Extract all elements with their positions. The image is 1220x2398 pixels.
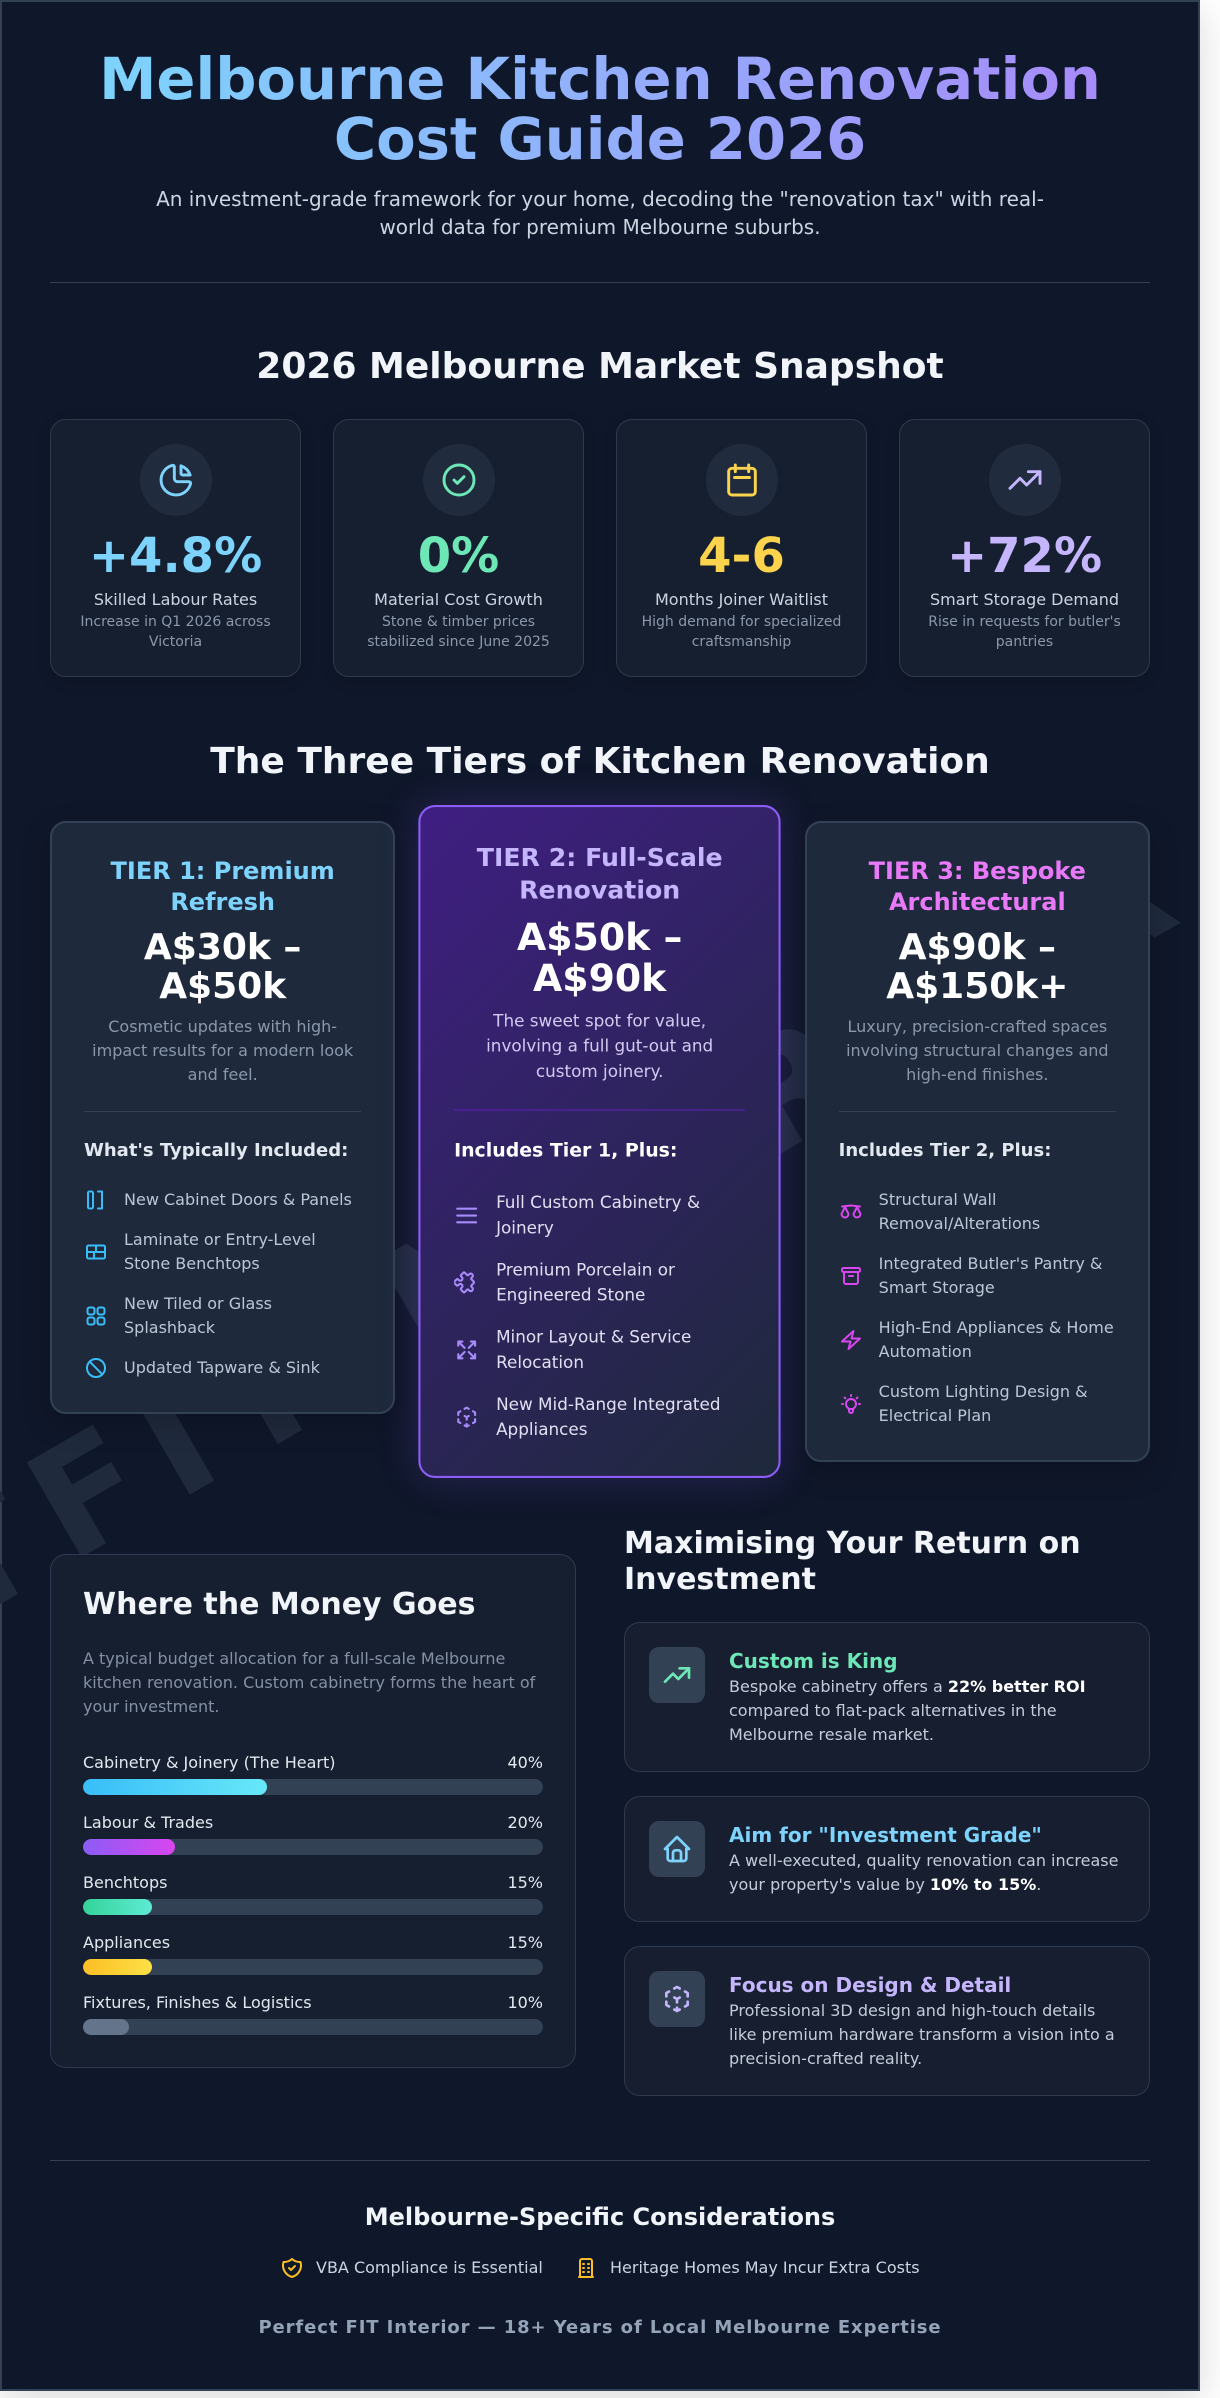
panel: stat skilled labour — [50, 419, 301, 677]
stat note — [928, 614, 1121, 650]
item: splashback — [86, 1294, 272, 1337]
item: appliances automation: Automation — [879, 1342, 972, 1361]
item: benchtops: Laminate or Entry-Level — [124, 1230, 316, 1249]
stat value: 0% — [418, 528, 499, 584]
text — [729, 1973, 1115, 2068]
heading: melbourne considerations: Melbourne-Specific Considerations — [365, 2203, 835, 2231]
bar: cabinetry 40%: 40% — [507, 1753, 543, 1772]
tier 1 title: Refresh — [170, 888, 275, 916]
tier 2 description: The sweet spot for value, — [494, 1011, 706, 1031]
item: cabinet doors: New Cabinet Doors & Panels — [124, 1190, 352, 1209]
bar: appliances 15%: 15% — [507, 1933, 543, 1952]
item: butler's pantry — [841, 1254, 1102, 1297]
tier 3 title — [868, 857, 1086, 916]
bar: benchtops 15% — [83, 1873, 543, 1915]
tier 1 price: A$30k – — [144, 927, 301, 968]
item: VBA compliance: VBA Compliance is Essential — [316, 2258, 543, 2277]
icon: trending up — [988, 444, 1060, 516]
stat value: 4-6 — [698, 528, 785, 584]
bar: benchtops 15%: Benchtops — [83, 1873, 167, 1892]
tier 1 description: impact results for a modern look — [92, 1041, 353, 1060]
text: Bespoke cabinetry offers a 22% better ROI — [729, 1677, 1086, 1696]
text: Custom is King — [729, 1649, 898, 1673]
tier 2 title: Renovation — [519, 876, 681, 905]
tier 3 description: high-end finishes. — [906, 1065, 1048, 1084]
title: Cost Guide 2026 — [334, 106, 866, 173]
stat label: Months Joiner Waitlist — [655, 590, 828, 609]
item: porcelain stone: Premium Porcelain or — [496, 1259, 675, 1279]
icon: trending up — [649, 1647, 705, 1703]
bar: benchtops 15%: 15% — [507, 1873, 543, 1892]
tier 1 list heading: What's Typically Included: — [84, 1140, 348, 1161]
icon: calendar — [706, 444, 778, 516]
tier 2 list heading: Includes Tier 1, Plus: — [454, 1140, 678, 1162]
tier 3 list heading: Includes Tier 2, Plus: — [839, 1140, 1051, 1161]
tier 2 description — [454, 1008, 746, 1110]
item: butler's pantry: Integrated Butler's Pantry & — [879, 1254, 1102, 1273]
item: custom cabinetry — [456, 1192, 700, 1237]
text — [729, 1823, 1118, 1894]
tier 1 description: and feel. — [188, 1065, 258, 1084]
intro text: A typical budget allocation for a full-scale Melbourne — [83, 1649, 505, 1668]
panel: design and detail — [624, 1946, 1150, 2096]
text: your property's value by 10% to 15%. — [729, 1875, 1041, 1894]
stat note — [80, 614, 271, 650]
stat note: pantries — [996, 634, 1053, 650]
intro text: kitchen renovation. Custom cabinetry forms the heart of — [83, 1673, 535, 1692]
tier 1 feature list — [86, 1190, 352, 1378]
tier 2 title — [476, 843, 723, 905]
text: compared to flat-pack alternatives in the — [729, 1701, 1057, 1720]
item: custom cabinetry: Full Custom Cabinetry & — [496, 1192, 700, 1212]
tier 3 description — [839, 1015, 1116, 1112]
heading: maximising return — [624, 1526, 1081, 1597]
stat note: Rise in requests for butler's — [928, 614, 1121, 630]
item: heritage homes: Heritage Homes May Incur Extra Costs — [610, 2258, 920, 2277]
item: integrated appliances: Appliances — [496, 1419, 588, 1439]
tier 1 title — [110, 857, 335, 916]
heading: Where the Money Goes — [83, 1587, 475, 1622]
text: like premium hardware transform a vision into a — [729, 2025, 1115, 2044]
panel: investment grade — [624, 1796, 1150, 1922]
bar: labour 20%: 20% — [507, 1813, 543, 1832]
item: lighting — [841, 1382, 1088, 1425]
bar: labour 20% — [83, 1813, 543, 1855]
panel: stat smart storage — [899, 419, 1150, 677]
bar: appliances 15%: Appliances — [83, 1933, 170, 1952]
heading: three tiers: The Three Tiers of Kitchen Renovation — [210, 740, 990, 782]
item: appliances automation: High-End Appliances & Home — [879, 1318, 1114, 1337]
tier 2 description: custom joinery. — [536, 1061, 664, 1081]
stat value: +4.8% — [89, 528, 262, 584]
panel: stat joiner waitlist — [616, 419, 867, 677]
text — [729, 1649, 1086, 1744]
stat label: Smart Storage Demand — [930, 590, 1119, 609]
stat label: Skilled Labour Rates — [94, 590, 257, 609]
stat label: Material Cost Growth — [374, 590, 543, 609]
subtitle: world data for premium Melbourne suburbs. — [379, 215, 821, 239]
bar: labour 20%: Labour & Trades — [83, 1813, 213, 1832]
item: integrated appliances: New Mid-Range Integrated — [496, 1394, 721, 1414]
item: integrated appliances — [457, 1394, 721, 1439]
item: structural wall — [840, 1190, 1040, 1233]
tier 3 description: Luxury, precision-crafted spaces — [847, 1017, 1107, 1036]
item: butler's pantry: Smart Storage — [879, 1278, 995, 1297]
tier 3 title: Architectural — [889, 888, 1066, 916]
bar: fixtures 10%: Fixtures, Finishes & Logistics — [83, 1993, 312, 2012]
bar: fixtures 10%: 10% — [507, 1993, 543, 2012]
text: Focus on Design & Detail — [729, 1973, 1011, 1997]
item: splashback: Splashback — [124, 1318, 215, 1337]
tier 1 price — [144, 927, 301, 1007]
item: benchtops: Stone Benchtops — [124, 1254, 260, 1273]
heading: maximising return: Maximising Your Return on — [624, 1526, 1081, 1561]
icon: 3d cube — [649, 1971, 705, 2027]
panel: stat material cost — [333, 419, 584, 677]
tier 3 description: involving structural changes and — [846, 1041, 1109, 1060]
tier 2 description: involving a full gut-out and — [486, 1036, 714, 1056]
panel: custom is king — [624, 1622, 1150, 1772]
item: tapware: Updated Tapware & Sink — [124, 1358, 320, 1377]
icon: home — [649, 1821, 705, 1877]
item: appliances automation — [841, 1318, 1114, 1361]
stat note: Victoria — [149, 634, 202, 650]
stat note: Stone & timber prices — [382, 614, 535, 630]
item: custom cabinetry: Joinery — [496, 1217, 554, 1237]
item: splashback: New Tiled or Glass — [124, 1294, 272, 1313]
tier 3 price: A$150k+ — [886, 966, 1068, 1007]
tier 1 description: Cosmetic updates with high- — [108, 1017, 337, 1036]
tier 2 price: A$90k — [533, 957, 667, 1000]
text: Aim for "Investment Grade" — [729, 1823, 1042, 1847]
item: layout relocation: Relocation — [496, 1352, 584, 1372]
bar: cabinetry 40% — [83, 1753, 543, 1795]
panel: where the money goes — [50, 1554, 576, 2068]
bar: fixtures 10% — [83, 1993, 543, 2035]
stat note: craftsmanship — [692, 634, 791, 650]
subtitle — [156, 187, 1044, 239]
icon: check circle — [422, 444, 494, 516]
text: Melbourne resale market. — [729, 1725, 934, 1744]
text: Professional 3D design and high-touch details — [729, 2001, 1095, 2020]
stat note: stabilized since June 2025 — [367, 634, 550, 650]
intro text: your investment. — [83, 1697, 220, 1716]
tier 2 title: TIER 2: Full-Scale — [477, 843, 723, 872]
subtitle: An investment-grade framework for your home, decoding the "renovation tax" with real- — [156, 187, 1044, 211]
tier 2 feature list — [454, 1192, 721, 1439]
title: Melbourne Kitchen Renovation — [99, 46, 1101, 113]
item: porcelain stone — [454, 1259, 675, 1305]
tier 1 description — [84, 1015, 361, 1112]
bar chart — [83, 1753, 543, 2035]
tier 2 price: A$50k – — [517, 916, 683, 959]
tier 3 price — [886, 927, 1068, 1007]
heading: market snapshot: 2026 Melbourne Market Snapshot — [256, 346, 944, 386]
icon: pie chart — [140, 444, 212, 516]
panel: tier 3 — [805, 821, 1150, 1462]
bar: cabinetry 40%: Cabinetry & Joinery (The Heart) — [83, 1753, 335, 1772]
item: layout relocation: Minor Layout & Service — [496, 1327, 692, 1347]
stat note: Increase in Q1 2026 across — [80, 614, 271, 630]
item: porcelain stone: Engineered Stone — [496, 1285, 646, 1305]
tier 1 title: TIER 1: Premium — [111, 857, 335, 885]
item: lighting: Electrical Plan — [879, 1406, 991, 1425]
bar: appliances 15% — [83, 1933, 543, 1975]
intro text — [83, 1649, 536, 1716]
tier 3 title: TIER 3: Bespoke — [869, 857, 1086, 885]
stat note: High demand for specialized — [642, 614, 841, 630]
item: structural wall: Structural Wall — [879, 1190, 996, 1209]
text: precision-crafted reality. — [729, 2049, 922, 2068]
stat note — [367, 614, 550, 650]
panel: tier 1 — [50, 821, 395, 1414]
stat note — [642, 614, 841, 650]
item: benchtops — [86, 1230, 316, 1273]
item: structural wall: Removal/Alterations — [879, 1214, 1040, 1233]
heading: maximising return: Investment — [624, 1562, 816, 1597]
item: lighting: Custom Lighting Design & — [879, 1382, 1088, 1401]
stat value: +72% — [947, 528, 1102, 584]
tier 3 feature list — [840, 1190, 1114, 1425]
text: A well-executed, quality renovation can increase — [729, 1851, 1118, 1870]
tier 3 price: A$90k – — [899, 927, 1056, 968]
tier 1 price: A$50k — [159, 966, 286, 1007]
tier 2 price — [517, 916, 683, 1000]
panel: tier 2 featured — [419, 805, 781, 1478]
item: layout relocation — [457, 1327, 692, 1372]
title — [50, 50, 1150, 171]
footer credit: Perfect FIT Interior — 18+ Years of Local Melbourne Expertise — [258, 2317, 942, 2338]
